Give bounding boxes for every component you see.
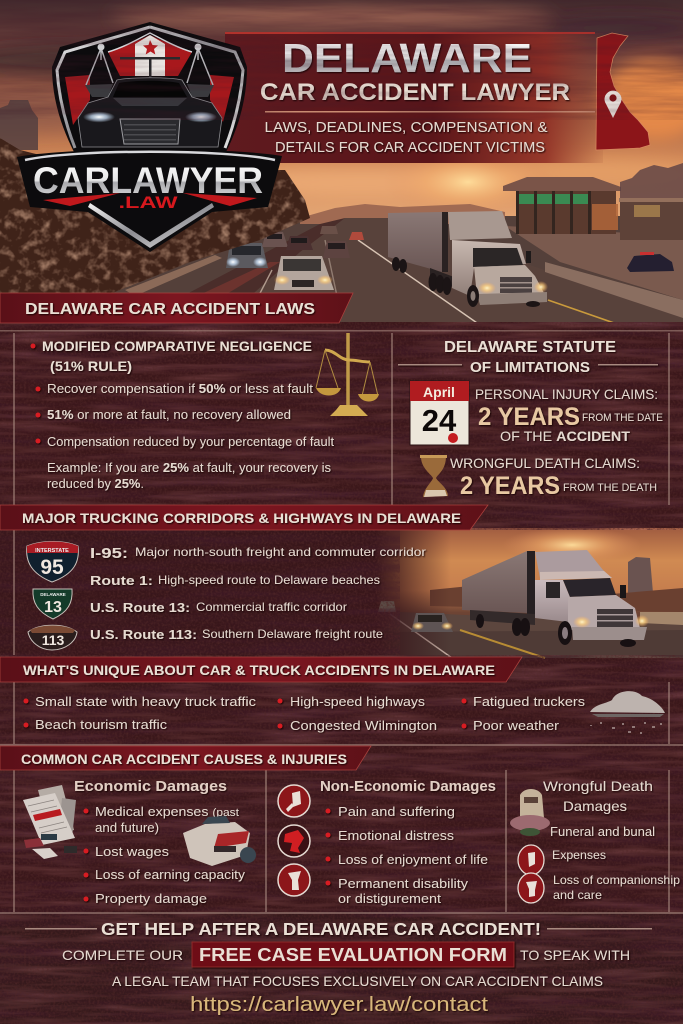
- panel: economic damages: Economic Damages: [74, 778, 227, 795]
- icon: scales of justice: [316, 333, 379, 416]
- text: wrongful death deadline: [450, 455, 657, 500]
- panel: economic damages: Lost wages: [95, 844, 170, 859]
- heading: Delaware: DELAWARE: [282, 35, 532, 81]
- panel: comparative negligence: reduced by 25%.: [47, 477, 144, 491]
- logo car: [78, 78, 222, 147]
- call to action: A LEGAL TEAM THAT FOCUSES EXCLUSIVELY ON CAR ACCIDENT CLAIMS: [112, 973, 603, 989]
- panel: wrongful death damages: Loss of companionship: [553, 873, 680, 887]
- lane lines: [240, 240, 490, 332]
- highway list: Major north-south freight and commuter corridor: [135, 545, 426, 559]
- call to action: TO SPEAK WITH: [520, 947, 630, 963]
- heading: statute of limitations: OF LIMITATIONS: [470, 360, 590, 376]
- highway list: Route 1:: [90, 573, 153, 588]
- logo red panels: [65, 75, 234, 125]
- highway list: U.S. Route 13:: [90, 600, 190, 615]
- distant hills: [300, 204, 505, 224]
- icon: interstate 95 shield: [27, 542, 78, 582]
- call to action: COMPLETE OUR: [62, 947, 183, 963]
- icon: medical documents: [23, 785, 77, 859]
- list: unique factors: Fatigued truckers: [473, 694, 586, 709]
- logo: CarLawyer.law shield: .LAW: [118, 193, 179, 212]
- heading: statute of limitations: [398, 339, 658, 376]
- panel: wrongful death damages: Wrongful Death: [543, 778, 653, 794]
- highway list: [90, 545, 426, 642]
- panel: wrongful death damages: [543, 778, 680, 902]
- icon: interstate 95 shield: INTERSTATE: [35, 548, 69, 554]
- section header: causes and injuries: COMMON CAR ACCIDENT CAUSES & INJURIES: [21, 751, 347, 767]
- panel: non-economic damages: Permanent disability: [338, 876, 469, 891]
- icon: route 13 shield: [33, 589, 72, 619]
- section header: trucking corridors: MAJOR TRUCKING CORRIDORS & HIGHWAYS IN DELAWARE: [22, 510, 461, 526]
- logo: CarLawyer.law shield: CARLAWYER: [33, 160, 263, 201]
- call to action: [25, 919, 652, 1016]
- heading: statute of limitations: DELAWARE STATUTE: [444, 339, 616, 356]
- call to action: FREE CASE EVALUATION FORM: [199, 945, 507, 965]
- text: wrongful death deadline: FROM THE DEATH: [563, 482, 657, 494]
- icon: route 13 shield: DELAWARE: [40, 592, 66, 597]
- trees left: [0, 138, 310, 292]
- icon: route 113 badge: [28, 625, 77, 650]
- text: wrongful death deadline: WRONGFUL DEATH CLAIMS:: [450, 455, 640, 471]
- panel: comparative negligence: Compensation reduced by your percentage of fault: [47, 435, 335, 449]
- header photo: highway at sunset: [0, 0, 683, 332]
- panel: wrongful death damages: Funeral and bunal: [550, 825, 655, 839]
- panel: economic damages: Medical expenses (past: [95, 804, 239, 819]
- section header: trucking corridors: [0, 505, 488, 530]
- panel: economic damages: Property damage: [95, 891, 207, 906]
- panel: comparative negligence: Recover compensation if 50% or less at fault: [47, 382, 314, 396]
- panel: economic damages: [74, 778, 246, 906]
- highway list: Southern Delaware freight route: [202, 627, 383, 641]
- section header: Delaware car accident laws: DELAWARE CAR ACCIDENT LAWS: [25, 301, 315, 318]
- panel: wrongful death damages: Damages: [563, 798, 627, 814]
- list: unique factors: High-speed highways: [290, 694, 426, 709]
- panel: comparative negligence: MODIFIED COMPARATIVE NEGLIGENCE: [42, 338, 312, 354]
- call to action: GET HELP AFTER A DELAWARE CAR ACCIDENT!: [101, 919, 541, 939]
- logo: CarLawyer.law shield: [17, 22, 282, 252]
- section header: what's unique: [0, 657, 522, 682]
- icon: interstate 95 shield: 95: [40, 556, 64, 579]
- text: personal injury deadline: [475, 386, 663, 444]
- skyline left: [0, 100, 38, 150]
- icon: hourglass: [420, 455, 448, 497]
- text: personal injury deadline: FROM THE DATE: [582, 412, 663, 424]
- highway list: Commercial traffic corridor: [196, 600, 347, 614]
- icon: calendar April 24: April: [423, 384, 455, 400]
- road surface: [120, 218, 683, 332]
- highway list: I-95:: [90, 545, 128, 562]
- highway list: High-speed route to Delaware beaches: [158, 573, 380, 587]
- panel: wrongful death damages: and care: [553, 888, 602, 902]
- highway cars: [378, 601, 453, 632]
- panel: non-economic damages: [320, 779, 496, 906]
- logo banner: [17, 149, 282, 252]
- section header: what's unique: WHAT'S UNIQUE ABOUT CAR & TRUCK ACCIDENTS IN DELAWARE: [23, 662, 495, 678]
- icon: calendar April 24: 24: [422, 403, 457, 438]
- highway truck: [462, 550, 649, 647]
- panel: comparative negligence: (51% RULE): [50, 358, 132, 374]
- logo flag: [108, 35, 192, 76]
- panel: non-economic damages: Non-Economic Damages: [320, 779, 496, 795]
- panel: economic damages: Loss of earning capacity: [95, 867, 246, 882]
- icon: calendar April 24: [410, 381, 469, 445]
- panel: non-economic damages: Loss of enjoyment of life: [338, 852, 488, 867]
- panel: comparative negligence: 51% or more at fault, no recovery allowed: [47, 408, 291, 422]
- traffic cars: [226, 226, 364, 290]
- highway photo background: [0, 527, 683, 658]
- panel: non-economic damages: or distigurement: [338, 891, 441, 906]
- list: unique factors: Beach tourism traffic: [35, 717, 168, 732]
- panel frame lines: [0, 330, 683, 914]
- highway list: U.S. Route 113:: [90, 627, 197, 642]
- panel: wrongful death damages: Expenses: [552, 848, 606, 862]
- icons: injury badges: [278, 785, 310, 896]
- icon: wrecked car: [183, 816, 256, 866]
- panel: comparative negligence: [30, 338, 335, 491]
- barrier: [545, 262, 683, 318]
- Delaware state map with pin: [596, 33, 650, 150]
- tagline: LAWS, DEADLINES, COMPENSATION &: [264, 119, 548, 136]
- icon: route 113 badge: 113: [42, 632, 65, 648]
- subheading: CAR ACCIDENT LAWYER: [260, 79, 570, 106]
- panel: economic damages: and future): [95, 820, 159, 835]
- text: personal injury deadline: OF THE ACCIDENT: [500, 428, 630, 444]
- title banner: DETAILS FOR CAR ACCIDENT VICTIMS: [275, 139, 545, 156]
- list: unique factors: [24, 694, 586, 733]
- text: personal injury deadline: PERSONAL INJURY CLAIMS:: [475, 386, 658, 402]
- section header: causes and injuries: [0, 746, 371, 770]
- list: unique factors: Congested Wilmington: [290, 718, 437, 733]
- icon: storm cloud: [590, 691, 665, 734]
- panel: non-economic damages: Pain and suffering: [338, 804, 455, 819]
- title banner: [225, 32, 603, 163]
- call to action: https://carlawyer.law/contact: [190, 993, 488, 1016]
- semi truck: [388, 211, 548, 307]
- icon: route 13 shield: 13: [44, 599, 62, 616]
- police car: [627, 252, 674, 272]
- toll plaza: [503, 163, 683, 240]
- list: unique factors: Poor weather: [473, 718, 560, 733]
- panels background: [0, 322, 683, 1024]
- icons: wrongful death badges: [518, 845, 544, 903]
- text: wrongful death deadline: 2 YEARS: [460, 472, 560, 500]
- icon: headstone with flowers: [510, 789, 550, 836]
- section header: Delaware car accident laws: [0, 293, 353, 323]
- list: unique factors: Small state with heavy truck traffic: [35, 694, 257, 709]
- panel: non-economic damages: Emotional distress: [338, 828, 455, 843]
- text: personal injury deadline: 2 YEARS: [478, 403, 580, 431]
- panel: comparative negligence: Example: If you are 25% at fault, your recovery is: [47, 461, 331, 475]
